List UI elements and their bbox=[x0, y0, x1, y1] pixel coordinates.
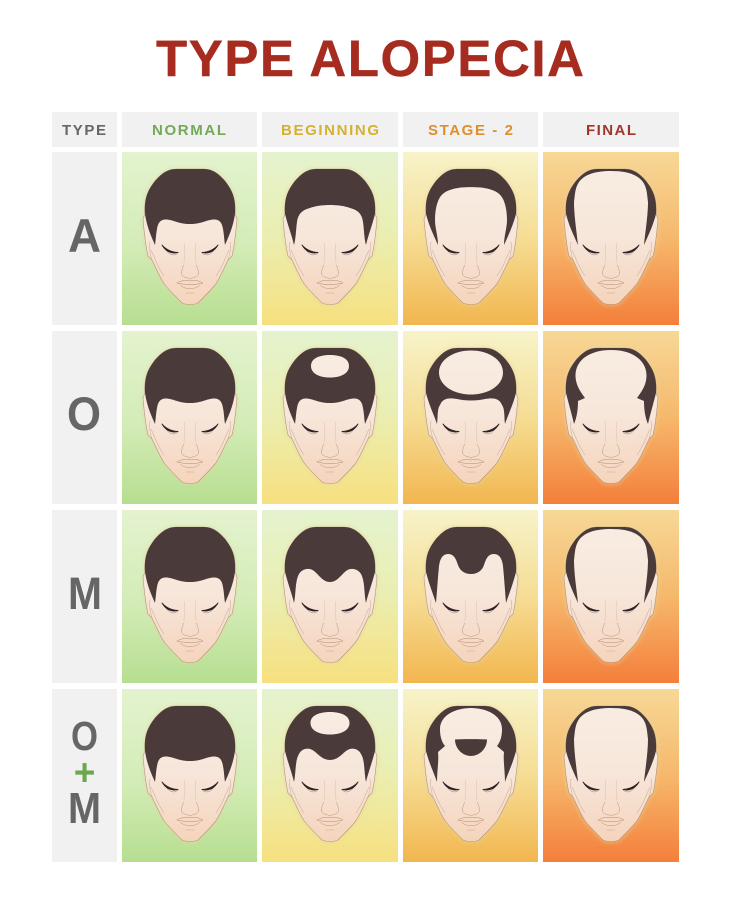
row: type O bbox=[52, 331, 679, 504]
row: type M bbox=[52, 510, 679, 683]
cell: A normal bbox=[122, 152, 257, 325]
title: TYPE ALOPECIA bbox=[156, 30, 584, 87]
header: beginning: BEGINNING bbox=[281, 122, 379, 139]
cell: M normal bbox=[122, 510, 257, 683]
cell: A final bbox=[543, 152, 679, 325]
label O: O bbox=[71, 713, 98, 759]
label O: O bbox=[67, 387, 101, 440]
cell: M stage 2 bbox=[403, 510, 538, 683]
label A: A bbox=[68, 209, 101, 262]
header: stage 2: STAGE - 2 bbox=[428, 122, 513, 139]
row: type A bbox=[52, 152, 679, 325]
header: final: FINAL bbox=[586, 122, 636, 139]
cell: O+M final bbox=[543, 689, 679, 862]
cell: O+M stage 2 bbox=[403, 689, 538, 862]
cell: O stage 2 bbox=[403, 331, 538, 504]
cell: A stage 2 bbox=[403, 152, 538, 325]
header: normal: NORMAL bbox=[152, 122, 226, 139]
cell: O final bbox=[543, 331, 679, 504]
label plus: + bbox=[74, 752, 95, 793]
row: type O+M bbox=[52, 689, 679, 862]
cell: M final bbox=[543, 510, 679, 683]
header: type: TYPE bbox=[62, 122, 106, 139]
cell: O+M beginning bbox=[262, 689, 398, 862]
cell: O beginning bbox=[262, 331, 398, 504]
header row bbox=[52, 112, 679, 147]
label M: M bbox=[68, 784, 101, 833]
cell: A beginning bbox=[262, 152, 398, 325]
cell: M beginning bbox=[262, 510, 398, 683]
cell: O+M normal bbox=[122, 689, 257, 862]
label M: M bbox=[68, 568, 102, 619]
cell: O normal bbox=[122, 331, 257, 504]
